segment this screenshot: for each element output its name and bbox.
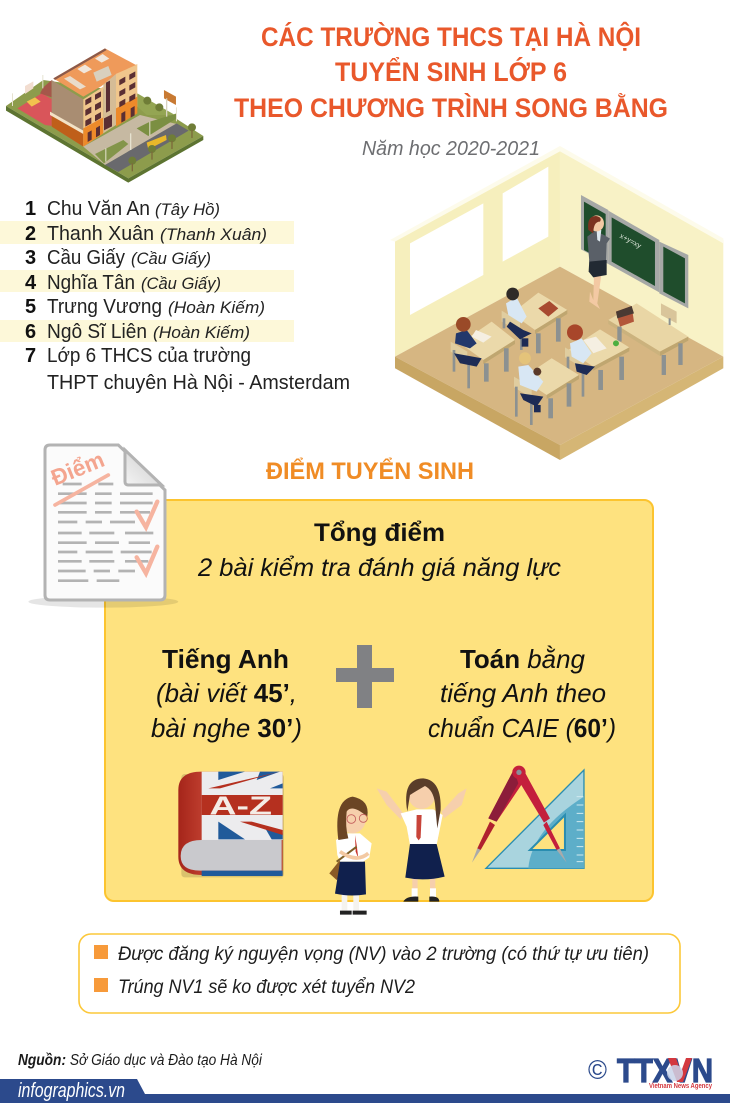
text: math test: Toán bằng: [460, 644, 586, 674]
title: CÁC TRƯỜNG THCS TẠI HÀ NỘI: [261, 21, 641, 52]
cheering student: [377, 778, 467, 902]
text: math test: chuẩn CAIE (60’): [428, 713, 616, 743]
text: English test: [151, 644, 302, 743]
school list: Chu Văn An: [47, 198, 150, 220]
footer bar: [0, 1079, 730, 1103]
icon: score sheet: [28, 445, 178, 608]
teacher: [587, 215, 610, 309]
school list: Nghĩa Tân: [47, 272, 135, 294]
blackboards: x+y=xy: [618, 231, 643, 250]
logo: TTXVN: [588, 1052, 713, 1090]
school list: Thanh Xuân: [47, 223, 154, 245]
panel: admission exam: [105, 500, 653, 901]
student desk D: [514, 352, 579, 425]
panel: notes: [79, 934, 680, 1013]
school list: (Tây Hồ): [155, 200, 220, 219]
school list: Trưng Vương: [47, 296, 162, 318]
teacher table: [608, 303, 688, 375]
footer bar: infographics.vn: [18, 1080, 125, 1102]
note 1: Được đăng ký nguyện vọng (NV) vào 2 trường (có thứ tự ưu tiên): [118, 944, 649, 965]
school list: (Thanh Xuân): [160, 225, 267, 244]
school list: (Cầu Giấy): [131, 249, 211, 268]
student desk A: [502, 288, 567, 353]
school list: (Hoàn Kiếm): [153, 323, 250, 342]
logo: TTXVN: Vietnam News Agency: [649, 1083, 712, 1090]
title: THEO CHƯƠNG TRÌNH SONG BẰNG: [234, 92, 668, 123]
icon: school building: [6, 48, 203, 183]
heading: admission scores: ĐIỂM TUYỂN SINH: [266, 457, 474, 485]
student desk B: [451, 317, 515, 388]
student with glasses: [329, 797, 372, 915]
school list: 7: [25, 345, 36, 367]
illustration: two students: [329, 778, 467, 915]
school list: 3: [25, 247, 36, 269]
text: total score: Tổng điểm: [314, 519, 445, 547]
source: Nguồn: Sở Giáo dục và Đào tạo Hà Nội: [18, 1052, 262, 1069]
school list: Cầu Giấy: [47, 247, 125, 269]
title: TUYỂN SINH LỚP 6: [335, 56, 567, 87]
title: [234, 21, 668, 123]
school list: Ngô Sĩ Liên: [47, 321, 147, 343]
school list: Lớp 6 THCS của trường: [47, 345, 251, 367]
school list: 1: [25, 198, 36, 220]
school list: 5: [25, 296, 36, 318]
text: total score: 2 bài kiểm tra đánh giá năng lực: [197, 554, 562, 582]
text: English test: Tiếng Anh: [162, 644, 289, 674]
text: total score: [197, 519, 562, 582]
text: English test: bài nghe 30’): [151, 713, 302, 743]
school list: THPT chuyên Hà Nội - Amsterdam: [47, 372, 350, 394]
illustration: classroom: [390, 146, 723, 460]
icon: English book: A-Z: [209, 790, 272, 820]
school list: [0, 198, 350, 394]
school list: 2: [25, 223, 36, 245]
icon: English book: [178, 772, 284, 877]
student desk C: [565, 324, 629, 397]
icon: compass and set square: [472, 766, 584, 868]
text: English test: (bài viết 45’,: [156, 678, 297, 708]
text: math test: tiếng Anh theo: [440, 678, 606, 708]
school list: 6: [25, 321, 36, 343]
school list: (Hoàn Kiếm): [168, 298, 265, 317]
logo: TTXVN: ©: [588, 1055, 607, 1085]
icon: score sheet: Điểm: [47, 446, 108, 491]
school list: 4: [25, 272, 37, 294]
note 2: Trúng NV1 sẽ ko được xét tuyển NV2: [118, 977, 415, 998]
blackboards: [581, 195, 688, 308]
icon: plus sign: [336, 645, 394, 708]
text: math test: [428, 644, 616, 743]
logo: TTXVN: TTXVN: [617, 1052, 713, 1089]
school list: (Cầu Giấy): [141, 274, 221, 293]
subtitle: school year: Năm học 2020-2021: [362, 138, 540, 160]
